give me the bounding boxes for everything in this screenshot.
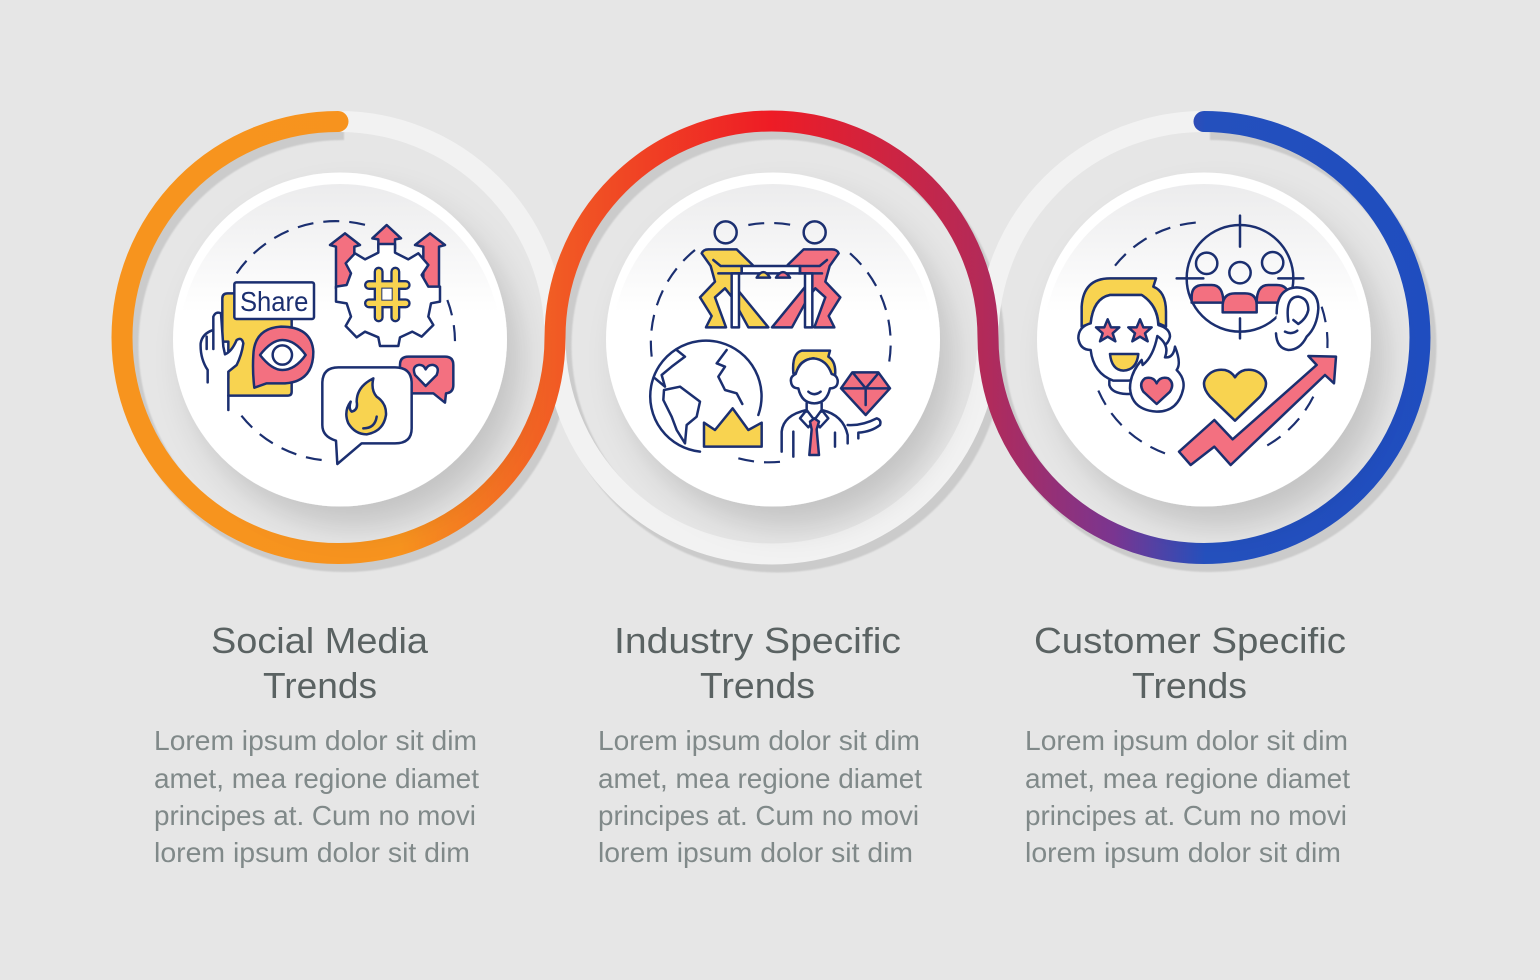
body text 3: lorem ipsum dolor sit dim [1025,837,1341,868]
phone, share box, hand and eye bubble [201,282,314,410]
body text 2: amet, mea regione diamet [598,763,922,794]
globe [650,341,762,452]
gear with hashtag and arrows [330,225,445,346]
panel: customer specific trends [1025,172,1371,868]
ribbon shadow [128,129,1426,562]
heading: customer specific trends: Customer Specific [1034,620,1346,661]
heading: social media trends [211,620,429,706]
body text 3 [1025,725,1350,868]
fire bubble [322,367,412,464]
star-eyed face with flame heart [1078,278,1184,412]
white disc 2 [606,172,940,506]
body text 1: principes at. Cum no movi [154,800,476,831]
panel: social media trends [154,172,507,868]
heading: industry specific trends: Industry Specific [614,620,901,661]
tug of war figures [700,221,840,327]
heading: social media trends: Social Media [211,620,429,661]
heart bubble [400,357,453,403]
body text 2: Lorem ipsum dolor sit dim [598,725,920,756]
icon: customer [1078,216,1336,465]
phone, share box, hand and eye bubble: Share [240,286,308,317]
body text 1: lorem ipsum dolor sit dim [154,837,470,868]
light background ring segments [338,121,1204,554]
target audience [1187,225,1293,332]
heading: industry specific trends [614,620,901,706]
body text 1: Lorem ipsum dolor sit dim [154,725,477,756]
white disc 3 [1037,172,1371,506]
body text 3: principes at. Cum no movi [1025,800,1347,831]
white disc 1 [173,172,507,506]
businessman with diamond [782,351,890,457]
panel: industry specific trends [598,172,940,868]
body text 1: amet, mea regione diamet [154,763,479,794]
ear [1276,287,1318,350]
growth arrow [1179,356,1336,465]
icon: industry [650,221,891,462]
heading: industry specific trends: Trends [700,665,815,706]
gradient ribbon connecting the three circles [122,121,1420,554]
yellow heart [1204,370,1266,421]
heading: customer specific trends: Trends [1132,665,1247,706]
body text 2 [598,725,922,868]
icon: social media [201,221,455,464]
body text 3: Lorem ipsum dolor sit dim [1025,725,1348,756]
body text 1 [154,725,479,868]
body text 3: amet, mea regione diamet [1025,763,1350,794]
body text 2: principes at. Cum no movi [598,800,919,831]
body text 2: lorem ipsum dolor sit dim [598,837,913,868]
heading: customer specific trends [1034,620,1346,706]
heading: social media trends: Trends [263,665,377,706]
crown [704,408,762,447]
